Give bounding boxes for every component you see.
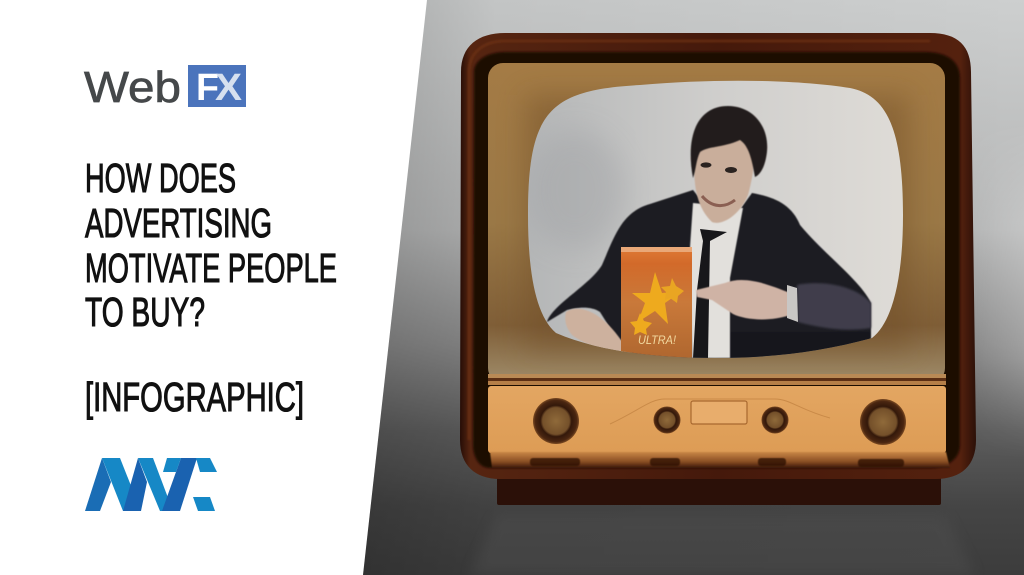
control ledge: [488, 374, 946, 385]
man: shirt cuff: [787, 285, 798, 322]
panel lower lip: [490, 452, 950, 468]
TV reflection: [470, 515, 975, 575]
man: shirt: [690, 203, 743, 358]
knob right small: [762, 406, 788, 434]
man: lower table shadow: [730, 338, 870, 358]
title: [INFOGRAPHIC]: [85, 374, 304, 420]
cereal box: [621, 247, 692, 358]
man: brows and eyes: [700, 162, 737, 173]
man: left hand: [565, 309, 632, 353]
man: sleeve highlight: [797, 283, 871, 330]
lip shadows below knobs: [530, 458, 904, 467]
knob right large: [860, 399, 906, 445]
man: tie: [693, 229, 727, 358]
man: mouth: [702, 196, 735, 206]
bezel: [488, 63, 945, 383]
title: ADVERTISING: [85, 200, 272, 246]
screen: [520, 75, 910, 365]
man: suit: [547, 190, 871, 360]
box stars: [632, 272, 671, 324]
TV base: [497, 470, 941, 505]
bezel dark shading: [525, 95, 910, 350]
cabinet highlight rim: [469, 41, 930, 440]
centre plate: [610, 399, 830, 424]
television: [460, 33, 976, 505]
title: MOTIVATE PEOPLE: [85, 245, 337, 291]
WebFX logo: F: [196, 67, 219, 109]
WebFX logo: [84, 63, 246, 112]
TV cabinet: [460, 33, 976, 479]
MT logo: [85, 458, 217, 511]
WebFX logo: Web: [84, 63, 181, 112]
title: TO BUY?: [85, 289, 205, 335]
display window: [691, 401, 747, 424]
control panel: [488, 386, 946, 453]
man: face: [694, 140, 754, 224]
knob left large: [533, 398, 579, 444]
cabinet inner dark band: [473, 52, 960, 468]
knob left small: [654, 406, 680, 434]
title: [85, 155, 337, 420]
screen mottling: [536, 136, 624, 244]
man: pointing hand: [696, 280, 790, 319]
man: hair: [691, 106, 767, 178]
WebFX logo: X: [215, 67, 243, 109]
title: HOW DOES: [85, 155, 236, 201]
cereal box: ULTRA!: [638, 333, 677, 347]
gray diagonal background panel: [363, 0, 1024, 575]
